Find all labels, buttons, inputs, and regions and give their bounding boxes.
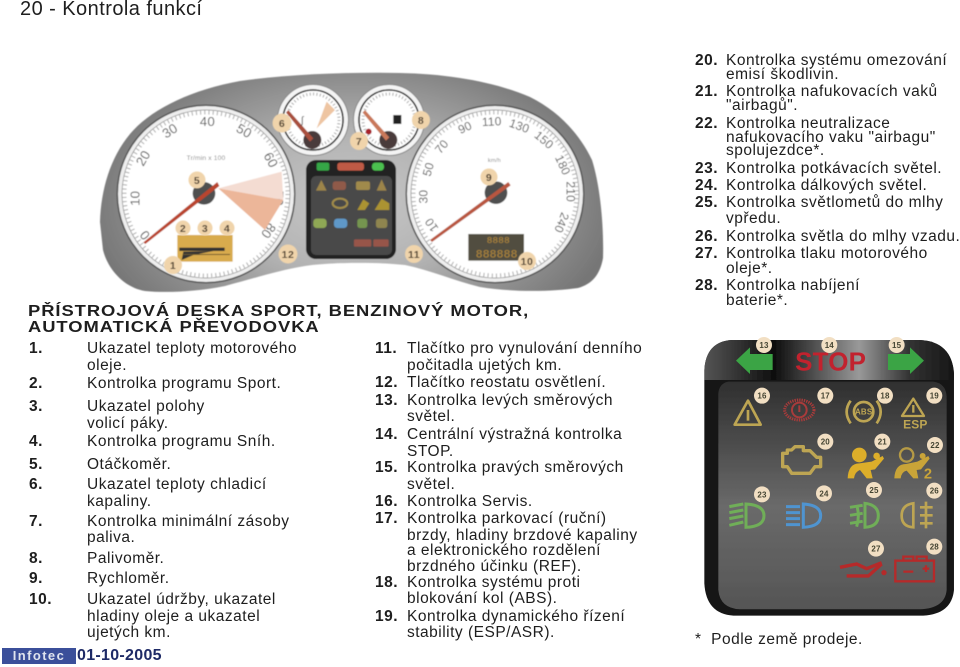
item 25: vpředu. bbox=[726, 210, 781, 227]
item 27: oleje*. bbox=[726, 260, 773, 277]
item 17: 17. bbox=[375, 510, 398, 527]
item 27 bbox=[695, 245, 928, 277]
item 18 bbox=[375, 574, 580, 607]
item 17: brzdy, hladiny brzdové kapaliny bbox=[407, 527, 638, 544]
item 17: brzdného účinku (REF). bbox=[407, 558, 582, 575]
dashboard callout numbers: 4 bbox=[224, 223, 230, 235]
item 15: světel. bbox=[407, 476, 455, 493]
item 25: Kontrolka světlometů do mlhy bbox=[726, 194, 943, 211]
item 10: 10. bbox=[29, 591, 52, 608]
item 6: kapaliny. bbox=[87, 493, 152, 510]
icon 21 airbag bbox=[848, 448, 884, 478]
number badges: 14 bbox=[825, 341, 834, 350]
item 19: stability (ESP/ASR). bbox=[407, 624, 555, 641]
item 13 bbox=[375, 392, 613, 425]
dashboard callout numbers: 1 bbox=[170, 260, 176, 272]
item 11: 11. bbox=[375, 340, 397, 357]
icon 25 front fog bbox=[850, 503, 878, 527]
item 24: Kontrolka dálkových světel. bbox=[726, 177, 927, 194]
item 26: 26. bbox=[695, 228, 718, 245]
item 19: 19. bbox=[375, 608, 398, 625]
number badges: 15 bbox=[892, 341, 902, 350]
item 22 bbox=[695, 115, 936, 159]
item 3: Ukazatel polohy bbox=[87, 398, 205, 415]
left gauge: tachometer: 10 bbox=[127, 191, 142, 206]
number badges: 24 bbox=[819, 489, 829, 498]
left gauge: tachometer: 70 bbox=[271, 190, 286, 206]
dashboard callout numbers: 8 bbox=[418, 115, 424, 127]
right gauge: speedometer: 50 bbox=[420, 161, 437, 178]
left gauge: tachometer: 0 bbox=[137, 227, 153, 243]
item 2: Kontrolka programu Sport. bbox=[87, 375, 281, 392]
central warning panel bbox=[306, 160, 396, 259]
item 27: Kontrolka tlaku motorového bbox=[726, 245, 928, 262]
item 1 bbox=[29, 340, 297, 374]
item 7 bbox=[29, 513, 290, 546]
dashboard callout numbers: 5 bbox=[194, 175, 200, 187]
right gauge: speedometer: 240 bbox=[551, 211, 572, 235]
item 4: 4. bbox=[29, 433, 43, 450]
STOP light: STOP bbox=[795, 346, 866, 376]
item 3 bbox=[29, 398, 205, 432]
left gauge: tachometer: 30 bbox=[159, 120, 180, 141]
number badges: 26 bbox=[930, 487, 939, 496]
item 13: světel. bbox=[407, 408, 455, 425]
number badges: 13 bbox=[759, 341, 769, 350]
item 21: "airbagů". bbox=[726, 97, 798, 114]
warning lights close-up panel: 2 bbox=[924, 467, 932, 483]
dashboard callout numbers: 9 bbox=[486, 172, 492, 184]
arrow 13 bbox=[736, 347, 773, 374]
icon 17 brake bbox=[785, 400, 814, 420]
icon 16 service triangle bbox=[735, 401, 761, 425]
item 19 bbox=[375, 608, 625, 641]
dashboard callout numbers: 7 bbox=[356, 136, 362, 148]
item 2: 2. bbox=[29, 375, 43, 392]
icon 26 rear fog bbox=[902, 502, 933, 528]
item 25 bbox=[695, 194, 943, 227]
item 18: 18. bbox=[375, 574, 398, 591]
item 15: Kontrolka pravých směrových bbox=[407, 459, 624, 476]
warning lights close-up panel: ABS bbox=[855, 408, 873, 417]
right gauge: speedometer: 8888 bbox=[487, 235, 510, 246]
dashboard callout numbers: 2 bbox=[180, 223, 186, 235]
inner panel bbox=[718, 382, 947, 609]
arrow 15 bbox=[888, 347, 924, 374]
dashboard callout numbers bbox=[164, 111, 536, 274]
right gauge: speedometer: 90 bbox=[456, 118, 474, 137]
item 6: 6. bbox=[29, 476, 43, 493]
item 20: emisí škodlivin. bbox=[726, 66, 839, 83]
item 8: 8. bbox=[29, 550, 43, 567]
small gauge: fuel level bbox=[354, 84, 424, 156]
item 10: Ukazatel údržby, ukazatel bbox=[87, 591, 276, 608]
left gauge: tachometer: 80 bbox=[258, 220, 279, 241]
right gauge: speedometer: 10 bbox=[422, 215, 441, 235]
number badges: 28 bbox=[930, 543, 939, 552]
item 6: Ukazatel teploty chladicí bbox=[87, 476, 267, 493]
section heading: PŘÍSTROJOVÁ DESKA SPORT, BENZINOVÝ MOTOR, bbox=[28, 303, 529, 320]
item 14 bbox=[375, 426, 622, 460]
date stamp: 01-10-2005 bbox=[77, 647, 162, 664]
dashboard callout numbers: 10 bbox=[521, 256, 533, 268]
small gauge: coolant temperature bbox=[278, 84, 348, 156]
item 22: 22. bbox=[695, 115, 718, 132]
number badges: 25 bbox=[869, 486, 879, 495]
item 20 bbox=[695, 52, 947, 83]
number badges: 20 bbox=[821, 438, 830, 447]
item 12: 12. bbox=[375, 374, 398, 391]
item 26: Kontrolka světla do mlhy vzadu. bbox=[726, 228, 960, 245]
left gauge: tachometer: 40 bbox=[200, 114, 215, 129]
left gauge: tachometer: 20 bbox=[133, 148, 153, 169]
item 10 bbox=[29, 591, 276, 641]
item 20: Kontrolka systému omezování bbox=[726, 52, 947, 69]
item 7: paliva. bbox=[87, 529, 135, 546]
item 25: 25. bbox=[695, 194, 718, 211]
item 23: Kontrolka potkávacích světel. bbox=[726, 160, 942, 177]
item 4: Kontrolka programu Sníh. bbox=[87, 433, 276, 450]
number badges: 22 bbox=[930, 441, 940, 450]
item 16: 16. bbox=[375, 493, 398, 510]
item 3: 3. bbox=[29, 398, 43, 415]
item 9: 9. bbox=[29, 570, 43, 587]
small gauge: coolant temperature: ∫ bbox=[300, 115, 305, 126]
item 1: 1. bbox=[29, 340, 43, 357]
right gauge: speedometer: 210 bbox=[564, 181, 578, 202]
item 15: 15. bbox=[375, 459, 398, 476]
item 14: Centrální výstražná kontrolka bbox=[407, 426, 622, 443]
icon 19 ESP bbox=[902, 399, 924, 416]
left gauge: tachometer: Tr/min x 100 bbox=[187, 155, 225, 162]
section heading bbox=[28, 302, 529, 336]
item 13: 13. bbox=[375, 392, 398, 409]
dashboard callout numbers: 12 bbox=[282, 249, 294, 261]
item 16: Kontrolka Servis. bbox=[407, 493, 533, 510]
item 17: Kontrolka parkovací (ruční) bbox=[407, 510, 607, 527]
number badges: 27 bbox=[871, 545, 881, 554]
item 9 bbox=[29, 570, 170, 587]
number badges: 23 bbox=[757, 490, 767, 499]
item 24: 24. bbox=[695, 177, 718, 194]
dashboard housing bbox=[100, 73, 603, 292]
item 22: spolujezdce*. bbox=[726, 142, 825, 159]
item 17: a elektronického rozdělení bbox=[407, 542, 601, 559]
dashboard callout numbers: 11 bbox=[408, 249, 420, 261]
item 14: STOP. bbox=[407, 443, 454, 460]
item 7: 7. bbox=[29, 513, 43, 530]
number badges: 19 bbox=[930, 392, 939, 401]
item 28: baterie*. bbox=[726, 292, 788, 309]
number badges: 17 bbox=[821, 392, 830, 401]
item 9: Rychloměr. bbox=[87, 570, 170, 587]
right gauge: speedometer: 180 bbox=[552, 153, 573, 177]
right gauge: speedometer: km/h bbox=[488, 158, 501, 164]
icon 22 passenger airbag bbox=[894, 448, 930, 478]
number badges bbox=[754, 337, 943, 557]
item 1: oleje. bbox=[87, 357, 127, 374]
item 8: Palivoměr. bbox=[87, 550, 164, 567]
right gauge: speedometer: 30 bbox=[416, 190, 430, 203]
number badges: 16 bbox=[757, 392, 767, 401]
right gauge: speedometer bbox=[406, 104, 584, 284]
item 19: Kontrolka dynamického řízení bbox=[407, 608, 625, 625]
item 22: Kontrolka neutralizace bbox=[726, 115, 890, 132]
item 20: 20. bbox=[695, 52, 718, 69]
item 22: nafukovacího vaku "airbagu" bbox=[726, 129, 936, 146]
item 14: 14. bbox=[375, 426, 398, 443]
dashboard callout numbers: 6 bbox=[279, 118, 285, 130]
item 28 bbox=[695, 277, 860, 309]
item 21 bbox=[695, 83, 938, 114]
right gauge: speedometer: 110 bbox=[481, 114, 502, 129]
item 23: 23. bbox=[695, 160, 718, 177]
left gauge: tachometer: 60 bbox=[261, 150, 281, 170]
left gauge: tachometer bbox=[116, 104, 296, 284]
item 28: Kontrolka nabíjení bbox=[726, 277, 860, 294]
item 11 bbox=[375, 340, 642, 374]
item 18: blokování kol (ABS). bbox=[407, 590, 557, 607]
number badges: 21 bbox=[878, 438, 887, 447]
item 10: ujetých km. bbox=[87, 624, 171, 641]
item 7: Kontrolka minimální zásoby bbox=[87, 513, 290, 530]
item 18: Kontrolka systému proti bbox=[407, 574, 580, 591]
item 13: Kontrolka levých směrových bbox=[407, 392, 613, 409]
icon 18 ABS bbox=[847, 401, 881, 423]
right gauge: speedometer: 150 bbox=[532, 128, 556, 152]
icon 24 main beam bbox=[786, 504, 821, 527]
item 8 bbox=[29, 550, 164, 567]
item 3: volicí páky. bbox=[87, 415, 169, 432]
item 1: Ukazatel teploty motorového bbox=[87, 340, 297, 357]
number badges: 18 bbox=[880, 392, 890, 401]
left gauge: tachometer: 50 bbox=[234, 121, 254, 141]
item 5 bbox=[29, 456, 171, 473]
warning lights close-up panel: ESP bbox=[903, 418, 928, 432]
right gauge: speedometer: 888888 bbox=[476, 249, 518, 261]
item 17 bbox=[375, 510, 638, 575]
item 10: hladiny oleje a ukazatel bbox=[87, 608, 260, 625]
item 5: Otáčkoměr. bbox=[87, 456, 171, 473]
icon 28 battery bbox=[895, 557, 934, 581]
Infotec badge bbox=[2, 648, 76, 664]
item 11: počitadla ujetých km. bbox=[407, 357, 562, 374]
Infotec badge: Infotec bbox=[13, 648, 65, 663]
item 27: 27. bbox=[695, 245, 718, 262]
right gauge: speedometer: 130 bbox=[507, 116, 531, 136]
panel frame bbox=[704, 340, 954, 616]
item 21: 21. bbox=[695, 83, 718, 100]
item 15 bbox=[375, 459, 624, 493]
item 21: Kontrolka nafukovacích vaků bbox=[726, 83, 938, 100]
icon 23 dipped beam bbox=[729, 504, 764, 527]
item 6 bbox=[29, 476, 267, 510]
warning lights close-up panel bbox=[704, 337, 954, 616]
dashboard callout numbers: 3 bbox=[202, 223, 208, 235]
section heading: AUTOMATICKÁ PŘEVODOVKA bbox=[28, 319, 320, 336]
right gauge: speedometer: 70 bbox=[432, 137, 452, 156]
item 11: Tlačítko pro vynulování denního bbox=[407, 340, 642, 357]
item 28: 28. bbox=[695, 277, 718, 294]
item 5: 5. bbox=[29, 456, 43, 473]
dashboard illustration bbox=[99, 72, 954, 616]
icon 20 engine bbox=[783, 447, 821, 473]
icon 27 oil pressure bbox=[840, 563, 882, 576]
footnote: * Podle země prodeje. bbox=[695, 631, 863, 648]
item 12: Tlačítko reostatu osvětlení. bbox=[407, 374, 606, 391]
